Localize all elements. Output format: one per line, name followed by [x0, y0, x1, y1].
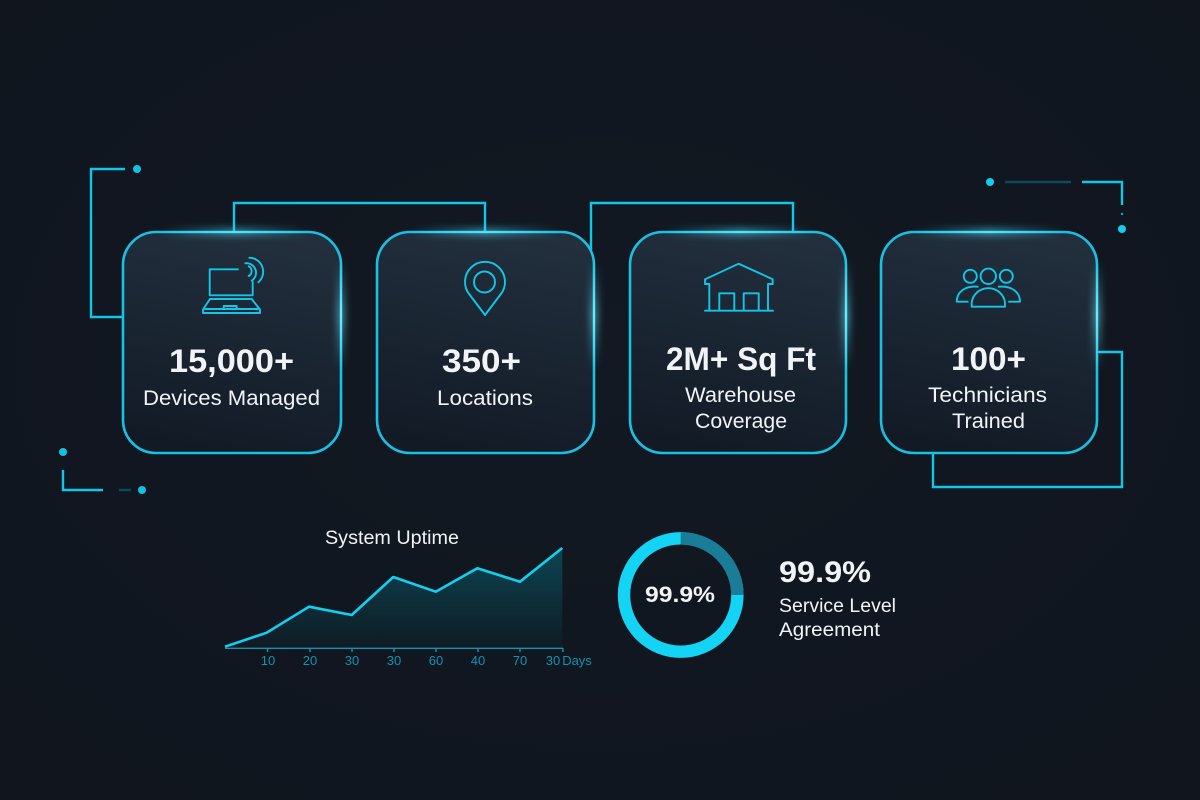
- stat: service level agreement: Service Level: [779, 595, 896, 617]
- label: devices managed: Devices Managed: [143, 386, 320, 410]
- label: technicians trained: Trained: [952, 409, 1025, 433]
- label: technicians trained: Technicians: [928, 383, 1047, 407]
- stat: service level agreement: Agreement: [779, 619, 881, 641]
- axis labels: 30: [345, 653, 359, 668]
- axis labels: Days: [562, 653, 592, 668]
- panel: technicians trained: [881, 229, 1100, 453]
- connector: top-left bracket: [91, 165, 141, 317]
- connector: cards 2 to 3: [591, 203, 793, 250]
- label: technicians trained: [928, 383, 1047, 433]
- chart: system uptime: [225, 528, 592, 668]
- icon: laptop with signal: [203, 258, 263, 313]
- stat: service level agreement: [779, 556, 896, 641]
- stat: 350+: 350+: [442, 343, 521, 379]
- area fill: [225, 548, 562, 648]
- panel: warehouse coverage: [630, 229, 849, 453]
- axis labels: 30: [546, 653, 560, 668]
- axis labels: 10: [261, 653, 275, 668]
- donut value: 99.9%: [645, 582, 715, 607]
- icon: warehouse: [705, 264, 773, 311]
- icon: people: [957, 269, 1020, 307]
- axis labels: 20: [303, 653, 317, 668]
- axis labels: 40: [471, 653, 485, 668]
- panel: locations: [377, 229, 597, 453]
- stat: 100+: 100+: [951, 341, 1026, 377]
- connector: card 4 bracket: [933, 352, 1122, 487]
- panel: devices managed: [123, 229, 344, 453]
- stat: service level agreement: 99.9%: [779, 556, 871, 589]
- chart title: System Uptime: [325, 528, 459, 549]
- axis labels: 70: [513, 653, 527, 668]
- label: locations: Locations: [437, 386, 533, 410]
- stat: 2M+ Sq Ft: 2M+ Sq Ft: [666, 341, 816, 377]
- label: warehouse coverage: [685, 383, 796, 433]
- trend line: [225, 548, 562, 647]
- connector: cards 1 to 2: [234, 203, 485, 232]
- axis labels: [261, 653, 592, 668]
- axis labels: 30: [387, 653, 401, 668]
- axis labels: 60: [429, 653, 443, 668]
- decoration: top-right bracket: [986, 178, 1126, 233]
- label: warehouse coverage: Coverage: [695, 409, 787, 433]
- x axis: [225, 648, 563, 652]
- stat: 15,000+: 15,000+: [169, 343, 294, 379]
- label: warehouse coverage: Warehouse: [685, 383, 796, 407]
- donut chart: service level: [624, 538, 737, 652]
- icon: map pin: [465, 262, 505, 315]
- decoration: bottom-left bracket: [59, 448, 146, 494]
